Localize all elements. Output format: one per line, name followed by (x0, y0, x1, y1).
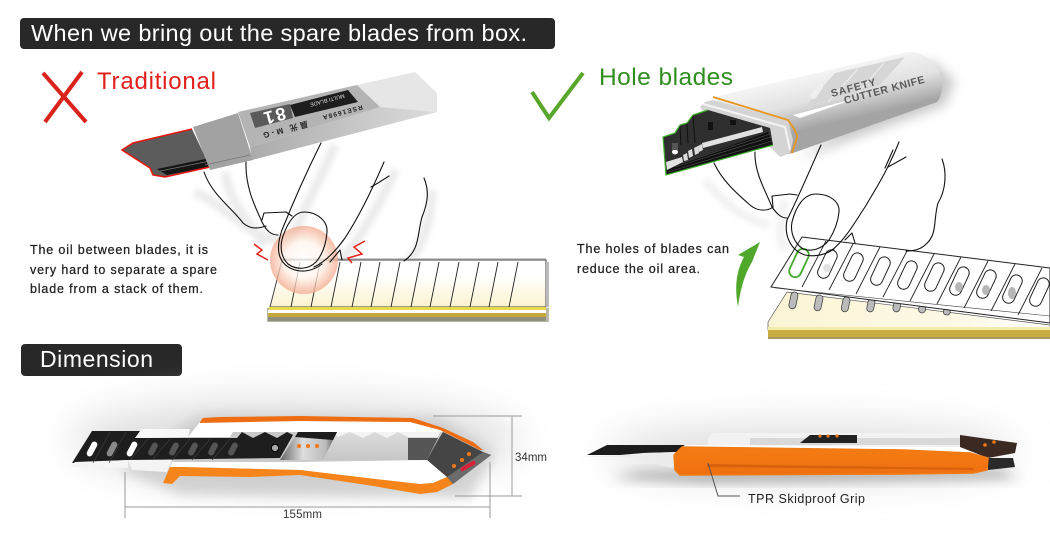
illustration: traditional blade box (122, 72, 437, 177)
illustration: traditional blade box: MULTI BLADE (309, 92, 345, 107)
heading bar: Dimension (21, 344, 182, 376)
text: traditional explanation: very hard to separate a spare (30, 263, 217, 277)
blade (587, 445, 685, 455)
illustration: hand shadow (705, 180, 785, 250)
panel: top view knife (71, 415, 547, 521)
dimension lines (125, 416, 522, 518)
icon: pain sparks (254, 241, 365, 263)
illustration: hand outline (204, 143, 427, 271)
shadow (120, 415, 495, 498)
heading: Hole blades: Hole blades (599, 64, 733, 91)
illustration: lifted hole blade (771, 237, 1050, 323)
background: grey halo (70, 400, 1015, 480)
text: hole blades explanation (577, 242, 729, 276)
text: traditional explanation: The oil between blades, it is (30, 243, 208, 257)
dark block (408, 438, 438, 460)
illustration: lower blade stack (768, 291, 1050, 339)
illustration: blade stack (267, 258, 549, 322)
illustration: safety cutter box (663, 52, 955, 175)
white sliders (135, 429, 190, 438)
text: traditional explanation (30, 243, 217, 296)
text: hole blades explanation: The holes of blades can (577, 242, 729, 256)
segment lines (93, 432, 230, 463)
box text: safety cutter knife: CUTTER KNIFE (843, 74, 926, 107)
callout: TPR Skidproof Grip: TPR Skidproof Grip (748, 492, 865, 506)
upper white body (188, 421, 443, 437)
illustration: traditional blade box: 晨光 M-G (262, 119, 309, 141)
panel: side view knife (582, 433, 1020, 506)
head (960, 435, 1017, 458)
illustration: hand outline (714, 142, 945, 256)
box collar (700, 100, 793, 157)
box label: 81: 81 (262, 103, 288, 128)
blade (122, 129, 210, 177)
label: 34mm: 34mm (515, 452, 547, 464)
black blade (72, 431, 293, 463)
knife window (323, 432, 440, 460)
heading bar: Dimension: Dimension (40, 346, 153, 372)
lower orange grip (163, 467, 453, 494)
illustration: traditional blade box: RSE1698A (322, 103, 363, 121)
black slider (800, 435, 857, 443)
knife head (427, 432, 491, 484)
orange grip (674, 447, 988, 475)
panel: traditional blades (30, 68, 549, 322)
heading: Traditional: Traditional (97, 68, 216, 95)
title bar: spare blades: When we bring out the spare blades from box. (31, 20, 527, 46)
box text: safety cutter knife: SAFETY (830, 76, 877, 100)
illustration: hole blades stack (663, 110, 773, 175)
upper white (708, 433, 965, 447)
illustration: red pressure glow (270, 226, 338, 294)
callout: TPR Skidproof Grip (708, 463, 865, 506)
slider (280, 432, 337, 460)
icon: red cross (43, 72, 86, 122)
blade holes (86, 441, 239, 457)
icon: green check (532, 73, 583, 118)
box decal (805, 57, 905, 107)
shadow (610, 470, 1020, 482)
illustration: hand shadow (195, 145, 432, 265)
box body (357, 72, 437, 112)
highlight: green hole (787, 247, 811, 279)
label: 155mm: 155mm (283, 509, 322, 521)
teeth (333, 432, 440, 438)
upper orange rim (200, 416, 483, 450)
text: hole blades explanation: reduce the oil area. (577, 262, 700, 276)
lower white body (170, 460, 447, 484)
icon: green up arrow (736, 242, 760, 307)
text: traditional explanation: blade from a stack of them. (30, 282, 203, 296)
blade edge (71, 460, 128, 468)
panel: hole blades (532, 52, 1050, 339)
